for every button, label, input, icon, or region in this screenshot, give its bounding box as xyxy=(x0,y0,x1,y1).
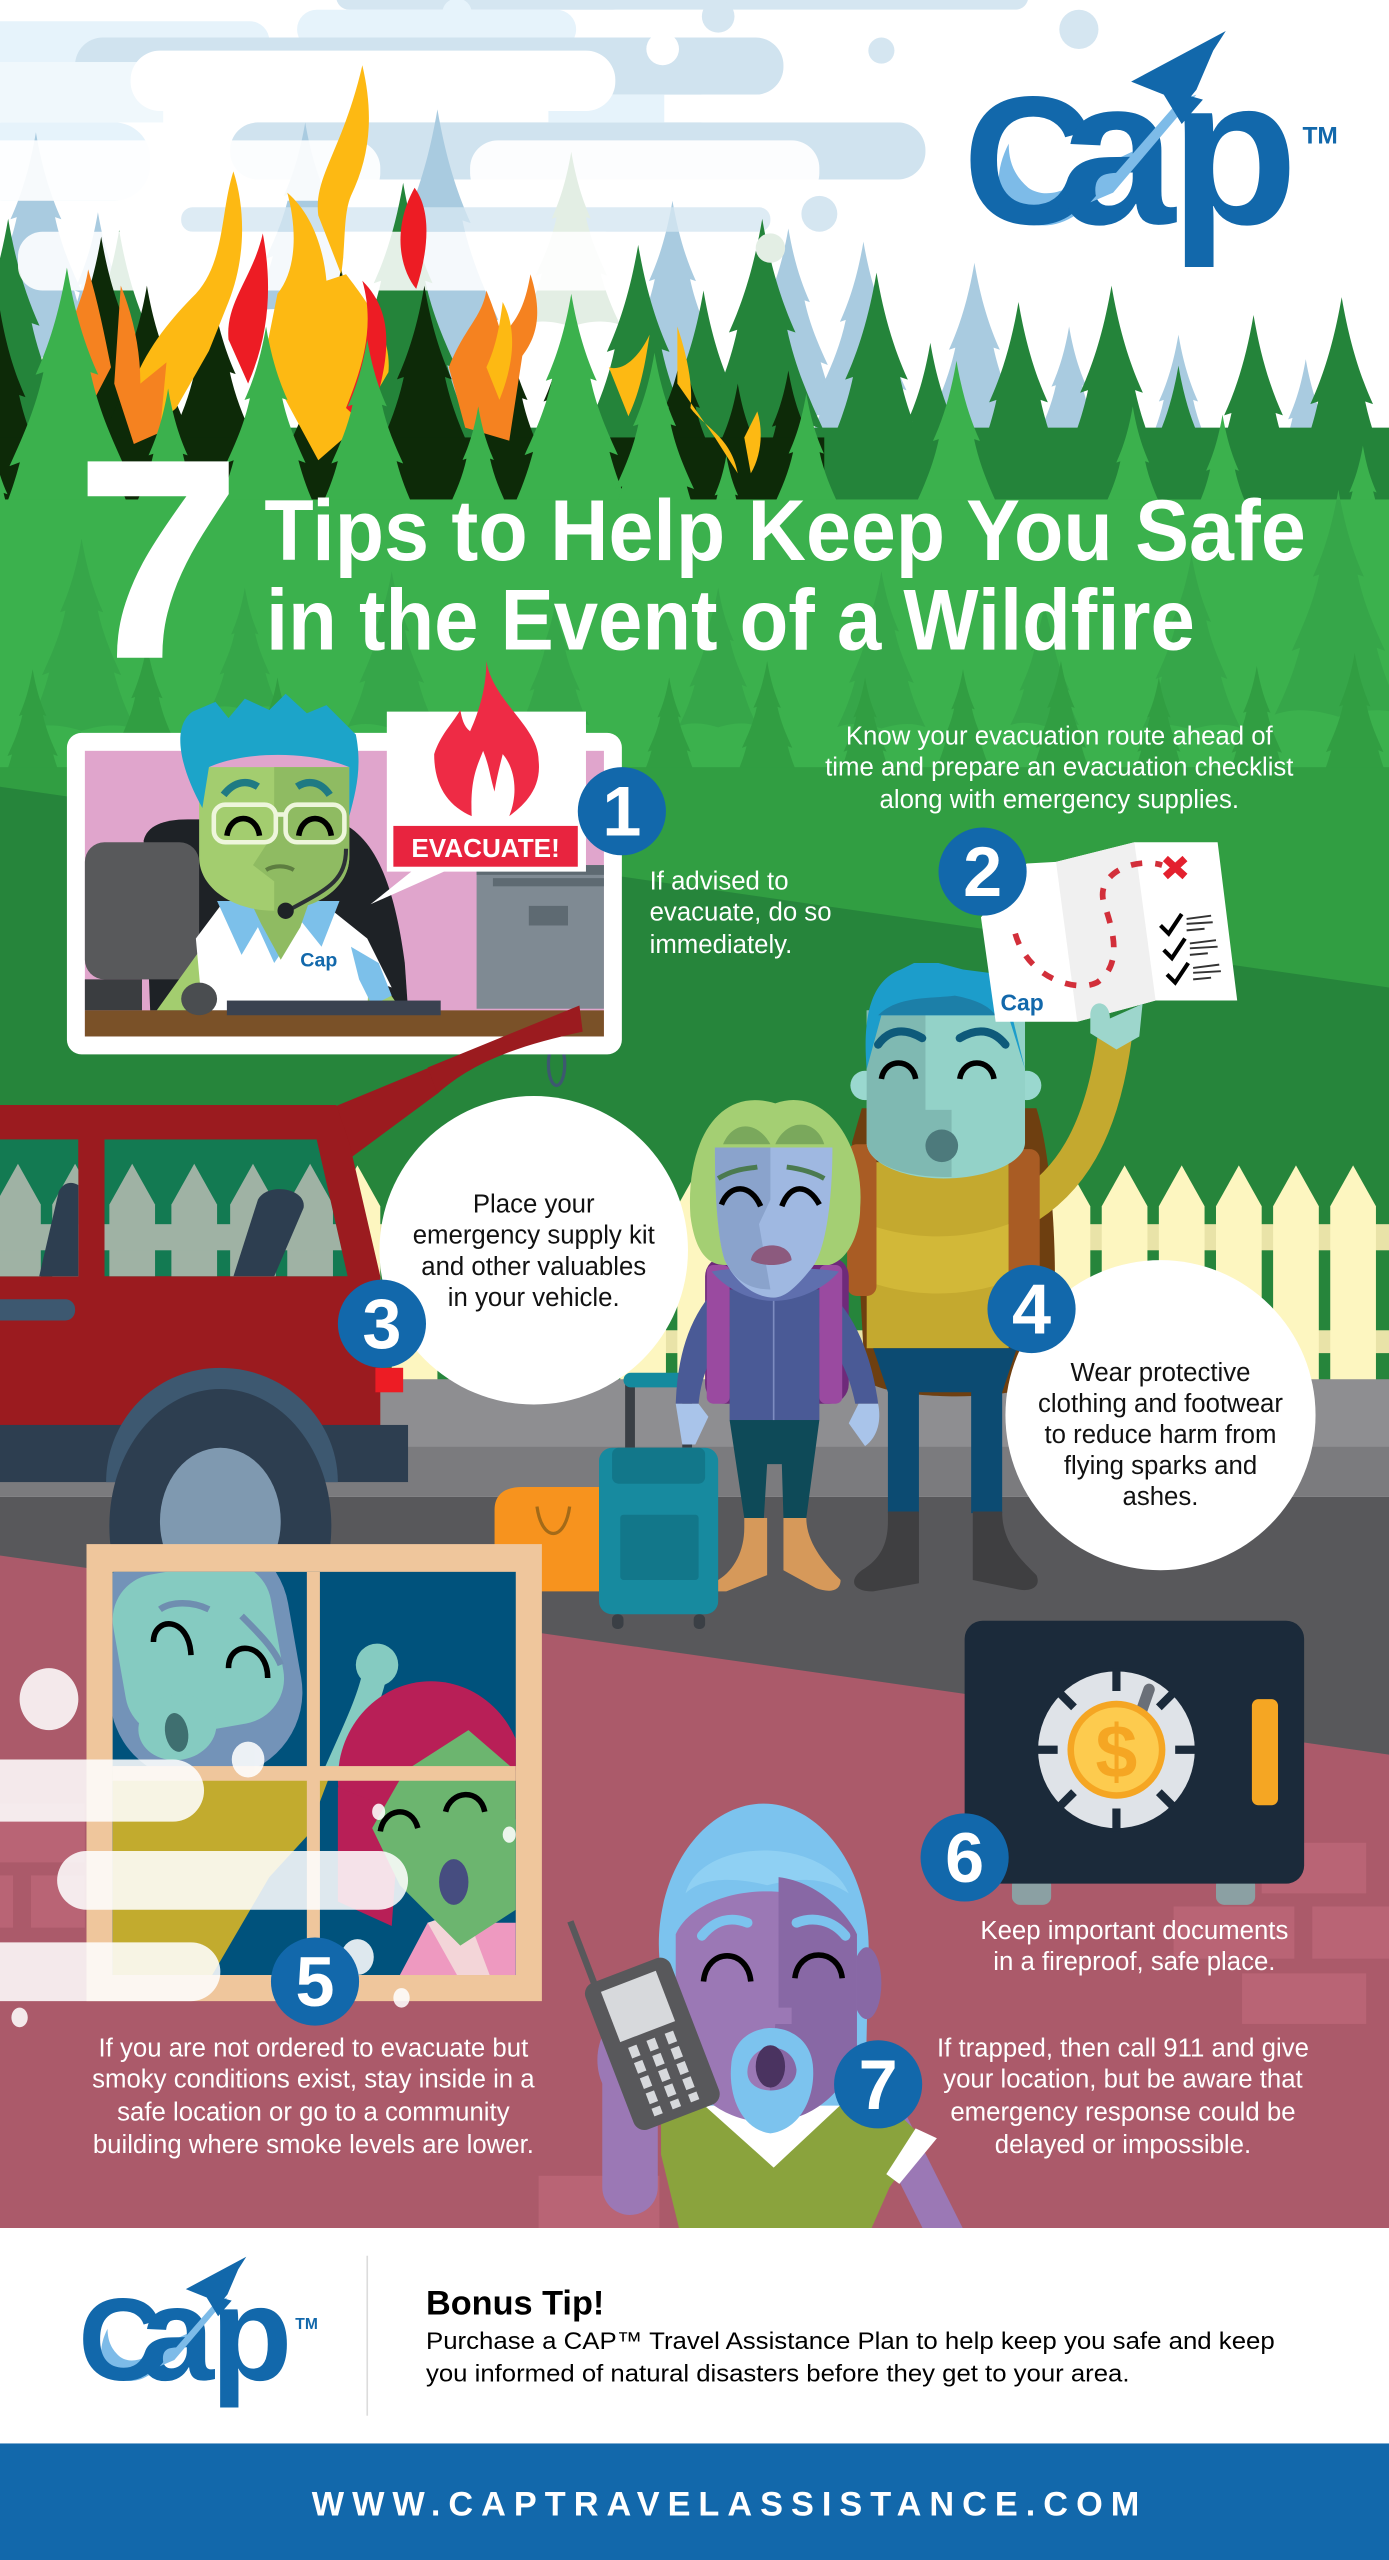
person: woman xyxy=(676,1100,879,1591)
right boot xyxy=(973,1511,1038,1590)
clouds: back layer xyxy=(0,0,1098,201)
title line 2: in the Event of a Wildfire xyxy=(266,573,1195,669)
footer band xyxy=(0,2443,1389,2560)
dial ticks xyxy=(1035,1668,1198,1831)
jacket arms xyxy=(676,1289,878,1404)
keyboard xyxy=(227,1001,441,1015)
number badge 7: 7 xyxy=(859,2045,898,2124)
text: tip 7: delayed or impossible. xyxy=(995,2131,1251,2159)
bags xyxy=(495,1373,718,1629)
hair xyxy=(659,1804,869,2106)
arms xyxy=(157,947,402,1010)
pale blue background trees xyxy=(0,109,1350,516)
backpack xyxy=(705,1257,849,1404)
text: tip 5: building where smoke levels are lower. xyxy=(93,2131,534,2159)
text: tip 1: If advised to xyxy=(650,868,789,896)
dark green diagonal band xyxy=(0,787,1389,1404)
phone body xyxy=(582,1954,723,2133)
clouds: white mid layer xyxy=(0,140,837,232)
face xyxy=(715,1147,832,1298)
street xyxy=(0,1379,1389,1823)
door handle xyxy=(0,1299,75,1320)
hair xyxy=(690,1100,861,1265)
mid band of green trees xyxy=(0,645,1389,1257)
woman hair xyxy=(338,1681,516,1820)
flames xyxy=(65,65,761,473)
text: tip 3: and other valuables xyxy=(421,1253,646,1281)
collar xyxy=(217,901,339,963)
bonus tip panel xyxy=(0,2228,1389,2443)
woman eyes xyxy=(380,1795,485,1831)
woman face xyxy=(372,1730,516,1946)
number badge 1: 1 xyxy=(602,772,641,851)
text: tip 4: to reduce harm from xyxy=(1045,1421,1276,1449)
text: tip 2: along with emergency supplies. xyxy=(880,786,1239,814)
filing cabinet xyxy=(477,865,604,1009)
map logo: Cap xyxy=(1001,989,1044,1015)
number badge 4 xyxy=(987,1265,1076,1353)
plane trail xyxy=(1090,95,1196,202)
left boot xyxy=(854,1511,919,1591)
woman shirt xyxy=(400,1923,516,1975)
checklist xyxy=(1160,914,1221,983)
man head xyxy=(112,1572,302,1781)
eyes xyxy=(721,1189,819,1206)
mouth xyxy=(751,1245,792,1265)
ears xyxy=(850,1071,880,1100)
text: tip 1: evacuate, do so xyxy=(650,899,832,927)
route xyxy=(1015,863,1162,986)
open tailgate xyxy=(335,1005,583,1159)
eyes xyxy=(703,1955,842,1982)
sleeve stripe xyxy=(886,2128,937,2184)
panel 1: call centre agent: EVACUATE! xyxy=(411,833,560,863)
suitcase wheels xyxy=(612,1614,623,1629)
callout circle: tip 3 xyxy=(379,1096,688,1405)
crescent shading xyxy=(999,144,1143,225)
safe xyxy=(965,1621,1304,1905)
man eyebrows xyxy=(160,1603,281,1665)
bag handle xyxy=(537,1507,570,1533)
dark green tree line xyxy=(0,183,1389,585)
light green front trees xyxy=(0,268,1389,580)
text: tip 5: safe location or go to a community xyxy=(117,2098,510,2126)
text: tip 3: emergency supply kit xyxy=(413,1222,655,1250)
number badge 6 xyxy=(921,1813,1009,1902)
logo: Cap top right xyxy=(963,31,1338,269)
man arm xyxy=(335,1678,374,1776)
glasses xyxy=(214,805,344,842)
orange bag xyxy=(495,1487,604,1591)
text: tip 7: emergency response could be xyxy=(950,2098,1296,2126)
tailgate strap xyxy=(548,1043,565,1085)
ear xyxy=(857,1947,882,2020)
window mullions xyxy=(307,1572,320,1975)
mouth xyxy=(266,866,294,870)
panel 1: call centre agent xyxy=(67,661,622,1054)
torso xyxy=(730,1289,819,1420)
pale tree over cloud xyxy=(522,152,620,326)
mid-green tree texture behind the title xyxy=(28,490,1389,731)
tire xyxy=(109,1389,331,1663)
car xyxy=(0,1054,566,1544)
straps xyxy=(847,1144,876,1296)
mouth xyxy=(756,2045,785,2088)
legs xyxy=(730,1420,819,1518)
evacuate banner xyxy=(393,826,578,867)
divider xyxy=(366,2256,368,2416)
panel 5: window with residents xyxy=(84,1520,542,2001)
brick ground xyxy=(0,1556,1389,2228)
speech bubble xyxy=(371,712,586,904)
bottom logo xyxy=(78,2257,318,2409)
sky background xyxy=(0,0,1389,490)
bonus body: Purchase a CAP™ Travel Assistance Plan to help keep you safe and keep xyxy=(426,2328,1275,2355)
smoke bars xyxy=(0,1668,516,2027)
monitor xyxy=(85,842,199,979)
shirt xyxy=(661,2106,924,2228)
hood xyxy=(712,1268,839,1301)
chair xyxy=(144,819,408,1010)
bottom logo: TM xyxy=(295,2316,318,2333)
eyes xyxy=(881,1063,994,1079)
panel background xyxy=(0,2228,1389,2443)
tail light xyxy=(375,1368,403,1392)
antenna xyxy=(567,1920,597,1984)
safe: $ xyxy=(1096,1710,1137,1794)
text: tip 7: your location, but be aware that xyxy=(943,2066,1303,2094)
bottom logo: p xyxy=(211,2260,292,2409)
text: tip 4: clothing and footwear xyxy=(1038,1390,1283,1418)
bonus body: you informed of natural disasters before they get to your area. xyxy=(426,2360,1129,2387)
hands xyxy=(676,1404,708,1445)
text: tip 3: Place your xyxy=(473,1191,595,1219)
trademark: TM xyxy=(1302,123,1338,150)
shirt logo: Cap xyxy=(300,949,337,971)
pink wall xyxy=(85,751,604,1036)
window frame xyxy=(87,1544,542,2001)
burned black trees xyxy=(0,237,829,537)
body xyxy=(0,1105,380,1436)
text: tip 4: flying sparks and xyxy=(1064,1452,1257,1480)
number badge 3: 3 xyxy=(362,1284,401,1363)
text: tip 6: in a fireproof, safe place. xyxy=(993,1948,1275,1976)
sweater xyxy=(867,1162,1009,1348)
number badge 7 xyxy=(834,2040,922,2128)
hair highlight xyxy=(686,1851,849,1893)
text: tip 6: Keep important documents xyxy=(980,1917,1288,1945)
wheel arch xyxy=(106,1368,338,1482)
screen xyxy=(601,1971,675,2042)
person: man on phone xyxy=(558,1804,955,2252)
eyebrows xyxy=(718,1167,824,1178)
cloud band behind flames xyxy=(18,232,785,291)
suitcase xyxy=(599,1448,718,1614)
map sheet xyxy=(981,842,1237,1022)
man eyes xyxy=(153,1624,268,1678)
numeral 7: 7 xyxy=(77,403,240,716)
feet xyxy=(1012,1877,1051,1905)
rear window: left xyxy=(0,1139,78,1276)
fence xyxy=(335,1165,1389,1381)
number badge 2: 2 xyxy=(963,832,1002,911)
text: tip 2: time and prepare an evacuation checklist xyxy=(825,753,1293,781)
headset xyxy=(291,849,346,909)
panel frame xyxy=(67,733,622,1054)
number badge 3 xyxy=(338,1280,426,1368)
mouth xyxy=(925,1130,958,1162)
paper plane xyxy=(1131,31,1226,124)
text: tip 5: smoky conditions exist, stay inside in a xyxy=(92,2066,535,2094)
face xyxy=(867,1010,1025,1178)
bumper xyxy=(0,1425,408,1482)
eyebrows xyxy=(878,1031,1005,1045)
suitcase handle xyxy=(630,1379,687,1448)
arms xyxy=(613,2060,647,2187)
number badge 6: 6 xyxy=(945,1818,984,1897)
flame icon xyxy=(434,661,539,816)
wordmark: a xyxy=(1059,36,1177,269)
face xyxy=(676,1891,857,2122)
title line 1: Tips to Help Keep You Safe xyxy=(264,483,1306,579)
straps xyxy=(707,1265,730,1404)
trousers xyxy=(873,1348,1017,1513)
pointer xyxy=(1139,1689,1149,1717)
glass xyxy=(113,1572,516,1975)
rear window: right xyxy=(104,1139,348,1276)
number badge 2 xyxy=(939,828,1027,916)
body xyxy=(965,1621,1304,1884)
text: tip 4: Wear protective xyxy=(1071,1359,1250,1387)
shirt xyxy=(196,906,392,1010)
callout circle: tip 4 xyxy=(1005,1260,1316,1570)
map xyxy=(981,842,1237,1050)
white collar xyxy=(706,2106,840,2168)
number badge 1 xyxy=(578,767,666,855)
tailgate tip over panel xyxy=(428,1005,583,1094)
title xyxy=(77,403,1306,716)
backpack xyxy=(852,1108,1055,1396)
hand xyxy=(1090,1003,1143,1050)
website url: WWW.CAPTRAVELASSISTANCE.COM xyxy=(312,2485,1139,2523)
person: man with map xyxy=(847,963,1115,1591)
green ground xyxy=(0,499,1389,1250)
fringe xyxy=(723,1125,824,1144)
coin xyxy=(1067,1701,1165,1799)
eyes xyxy=(227,819,331,836)
text: tip 1: immediately. xyxy=(650,931,792,959)
handle xyxy=(1252,1699,1278,1805)
raised arm xyxy=(1020,1036,1115,1211)
bottom logo: C xyxy=(78,2274,163,2405)
eyebrows xyxy=(224,783,330,795)
text: tip 2: Know your evacuation route ahead of xyxy=(846,722,1274,750)
text: tip 7: If trapped, then call 911 and give xyxy=(937,2035,1309,2063)
mouse xyxy=(181,983,217,1015)
left boot xyxy=(718,1518,767,1591)
neck xyxy=(245,890,313,960)
wordmark: C xyxy=(963,59,1095,263)
number badge 5 xyxy=(271,1937,359,2026)
man sweater xyxy=(113,1763,335,1975)
destination x xyxy=(1165,859,1185,877)
text: tip 4: ashes. xyxy=(1123,1483,1198,1511)
dial xyxy=(1038,1671,1195,1828)
hub xyxy=(160,1448,281,1595)
residents xyxy=(112,1572,516,1975)
woman mouth xyxy=(439,1859,468,1905)
beard xyxy=(731,2028,813,2133)
hand xyxy=(597,2038,605,2084)
number badge 5: 5 xyxy=(295,1942,335,2021)
bonus heading: Bonus Tip! xyxy=(426,2285,604,2323)
text: tip 3: in your vehicle. xyxy=(448,1284,620,1312)
desk xyxy=(85,1010,604,1036)
eyebrows xyxy=(702,1920,845,1936)
number badge 4: 4 xyxy=(1012,1270,1051,1349)
hair xyxy=(180,694,359,816)
text: tip 5: If you are not ordered to evacuate but xyxy=(99,2035,528,2063)
bottom logo: a xyxy=(140,2260,216,2409)
phone xyxy=(567,1920,720,2130)
sleeves xyxy=(351,947,392,1005)
head xyxy=(199,767,349,911)
right boot xyxy=(783,1518,841,1591)
wordmark: p xyxy=(1170,36,1298,269)
keypad xyxy=(632,2032,695,2115)
bricks xyxy=(0,1804,1389,2228)
hair xyxy=(866,963,1025,1069)
